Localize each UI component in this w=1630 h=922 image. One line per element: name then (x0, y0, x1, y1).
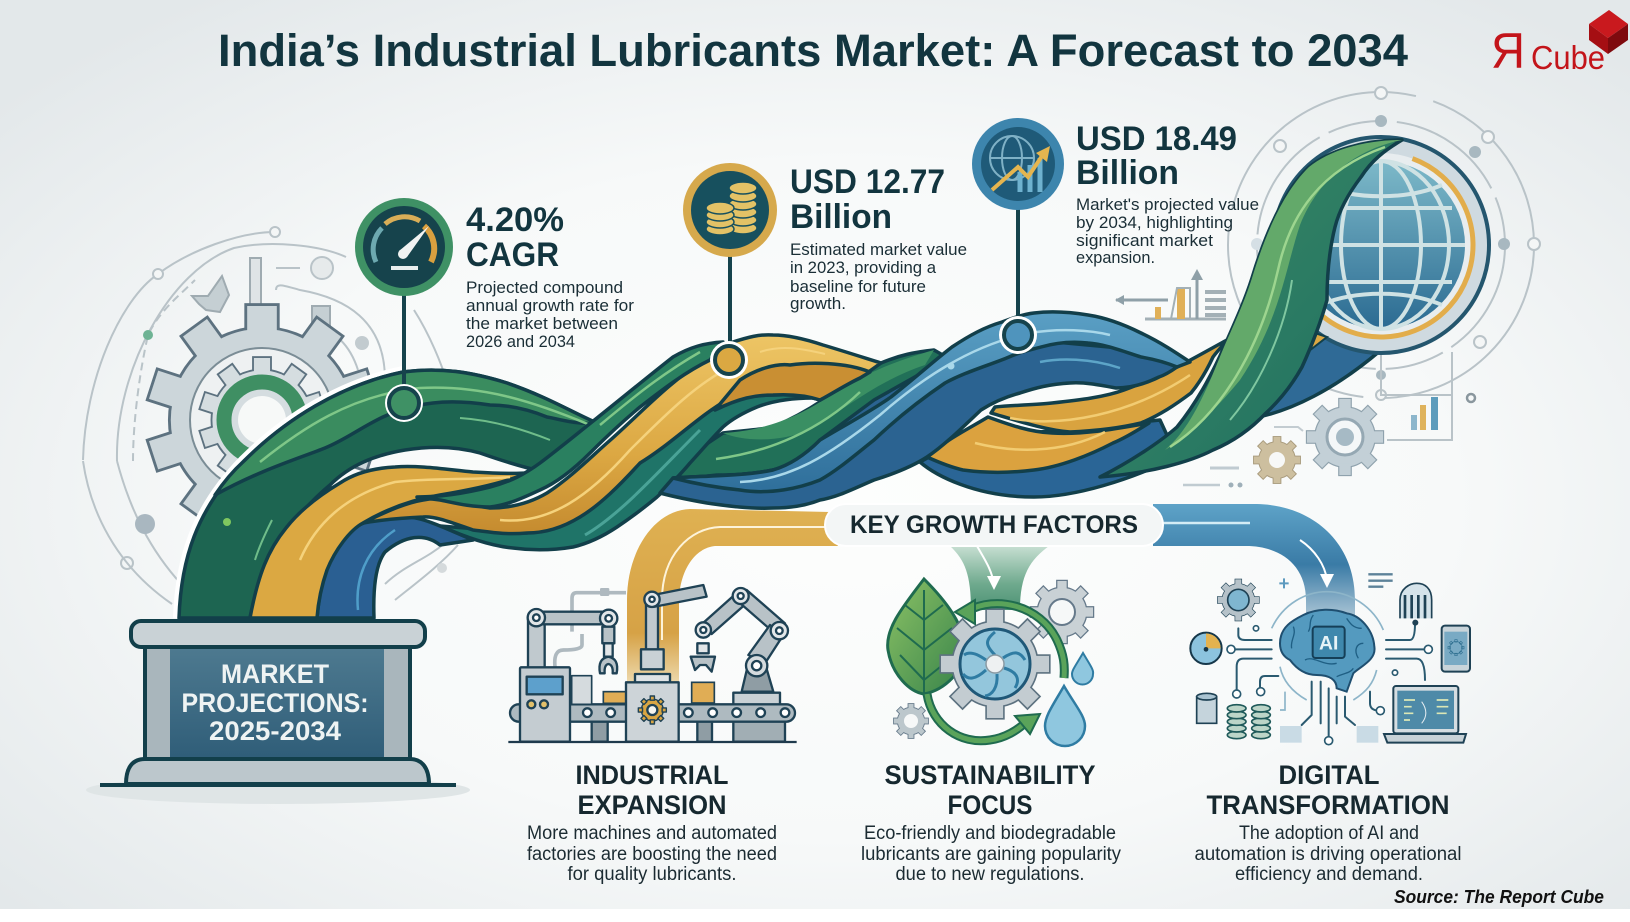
factor: sustainability focus: due to new regulations. (896, 864, 1084, 885)
ribbon: big green rising to globe (1100, 140, 1402, 477)
leaf (888, 579, 965, 694)
braided market ribbons (179, 127, 1499, 618)
ribbon: blue lobe behind globe (1240, 330, 1381, 420)
ribbon: green middle band (673, 350, 960, 477)
factor: sustainability focus: Eco-friendly and biodegradable (864, 823, 1116, 844)
factor: industrial expansion: for quality lubricants. (568, 864, 736, 885)
small bar chart above braid (1115, 269, 1226, 319)
factor: digital transformation: automation is driving operational (1194, 844, 1462, 865)
icon: speedometer (355, 198, 453, 296)
icon: factory robots (508, 585, 797, 742)
connector pipes: key growth factors: KEY GROWTH FACTORS (850, 511, 1138, 539)
right decoration: circuit arcs around globe (1115, 87, 1540, 488)
stat: USD 18.49 Billion: significant market (1076, 231, 1213, 250)
pedestal: market projections (86, 621, 470, 804)
factor: industrial expansion: More machines and automated (527, 823, 777, 844)
factor: industrial expansion (527, 760, 777, 885)
icon: grey gear (1307, 399, 1383, 475)
stat: 4.20% CAGR (355, 198, 634, 422)
factor: digital transformation: The adoption of AI and (1239, 823, 1419, 844)
factor: digital transformation (1194, 760, 1462, 885)
robot arm three (691, 588, 788, 692)
ribbon: dark blue arch (660, 340, 1177, 508)
factor: industrial expansion: factories are boosting the need (527, 844, 777, 865)
laptop (1393, 686, 1458, 733)
stat: 4.20% CAGR: Projected compound (466, 278, 623, 297)
icon: sustainability leaf and turbine gear (888, 579, 1093, 746)
stat: 4.20% CAGR: annual growth rate for (466, 296, 634, 315)
database (1197, 693, 1270, 739)
title: India’s Industrial Lubricants Market: A Forecast to 2034 (218, 25, 1408, 76)
stat: USD 12.77 Billion: Billion (790, 198, 892, 236)
control cabinet (520, 667, 592, 742)
ribbon: light blue arch (673, 312, 1190, 492)
phone (1442, 626, 1470, 672)
factor: digital transformation: DIGITAL (1278, 760, 1380, 790)
factor: industrial expansion: EXPANSION (578, 790, 726, 820)
stat: 4.20% CAGR: the market between (466, 314, 618, 333)
stat: USD 12.77 Billion: USD 12.77 (790, 163, 945, 201)
stat: USD 12.77 Billion: growth. (790, 294, 846, 313)
stat: USD 18.49 Billion: USD 18.49 (1076, 120, 1237, 158)
globe (1263, 127, 1499, 363)
gold sliver (1295, 333, 1327, 358)
factor: digital transformation: TRANSFORMATION (1206, 790, 1450, 820)
left decoration: gear and circuit arcs (83, 227, 458, 604)
stat: USD 18.49 Billion: Market's projected value (1076, 195, 1259, 214)
ribbon: teal strand (440, 387, 813, 550)
stat: 4.20% CAGR: 4.20% (466, 201, 564, 239)
stat: USD 12.77 Billion: Estimated market value (790, 240, 967, 259)
box on conveyor (692, 682, 714, 703)
logo: RCube: Я (1491, 23, 1525, 79)
factor: digital transformation: efficiency and demand. (1235, 864, 1423, 885)
gear (1218, 579, 1259, 621)
small gear (894, 704, 928, 738)
icon: digital AI brain and circuits: AI (1319, 633, 1338, 654)
connector pipes: key growth factors (627, 504, 1355, 700)
robot arm one (528, 609, 617, 673)
stat: 4.20% CAGR: 2026 and 2034 (466, 332, 575, 351)
gauge (1190, 633, 1222, 664)
stat: USD 18.49 Billion: Billion (1076, 154, 1179, 192)
droplets (1072, 653, 1093, 684)
ribbon: big lower blue (920, 420, 1177, 497)
list and chip (1368, 574, 1393, 587)
factor: sustainability focus (861, 760, 1121, 885)
conveyor (510, 693, 795, 742)
small bar chart right (1411, 397, 1438, 430)
ribbon: gold lower band right (927, 417, 1149, 472)
source note: Source: The Report Cube (1394, 887, 1604, 907)
pill (825, 504, 1163, 546)
icon: large gear (149, 306, 375, 534)
stat: USD 18.49 Billion: by 2034, highlighting (1076, 213, 1233, 232)
robot arm two (635, 585, 707, 683)
ribbon: gold upper band right (991, 340, 1227, 432)
logo: RCube (1491, 10, 1628, 79)
ribbon: green diagonal strip (417, 342, 723, 507)
circuit lines (1235, 623, 1425, 737)
factor: industrial expansion: INDUSTRIAL (576, 760, 728, 790)
icon: digital AI brain and circuits (1190, 574, 1470, 745)
icon: tan gear (1254, 437, 1300, 483)
factor: sustainability focus: SUSTAINABILITY (884, 760, 1096, 790)
ribbon: blue base strand (317, 517, 473, 618)
arcs around brain (1272, 592, 1383, 710)
pedestal: market projections: 2025-2034 (209, 716, 341, 746)
brain (1280, 610, 1375, 692)
stat: USD 12.77 Billion: in 2023, providing a (790, 258, 937, 277)
blue pipe (1153, 504, 1355, 625)
factor: sustainability focus: FOCUS (948, 790, 1032, 820)
grey gear (1031, 581, 1093, 643)
icon: coins (683, 163, 777, 257)
icon: red cube (1589, 10, 1628, 54)
circular arrows (968, 604, 1064, 678)
ribbon: first green strand (179, 372, 403, 618)
stat: USD 12.77 Billion: baseline for future (790, 277, 926, 296)
ribbon: gold strand from base (250, 467, 527, 618)
pedestal: market projections: PROJECTIONS: (182, 688, 368, 718)
arrow: to digital (1300, 540, 1334, 588)
ribbon: gold main strand (363, 335, 881, 534)
stat: USD 12.77 Billion (683, 163, 967, 379)
factor: sustainability focus: lubricants are gaining popularity (861, 844, 1121, 865)
centre machine with gear (626, 682, 679, 742)
stat: USD 18.49 Billion: expansion. (1076, 248, 1155, 267)
green pipe (950, 546, 1049, 610)
line and pin (728, 255, 732, 345)
turbine gear (941, 610, 1049, 718)
pedestal: market projections: MARKET (221, 659, 329, 689)
stat: 4.20% CAGR: CAGR (466, 236, 559, 274)
arrow: to sustainability (977, 546, 1001, 590)
line and pin (1016, 207, 1020, 320)
line and pin (402, 295, 406, 390)
gold pipe (627, 509, 838, 700)
stat: USD 18.49 Billion (972, 118, 1259, 354)
icon: globe with rising arrow (972, 118, 1064, 210)
logo: RCube: Cube (1531, 39, 1605, 76)
icon: small hex gear (1467, 394, 1475, 402)
